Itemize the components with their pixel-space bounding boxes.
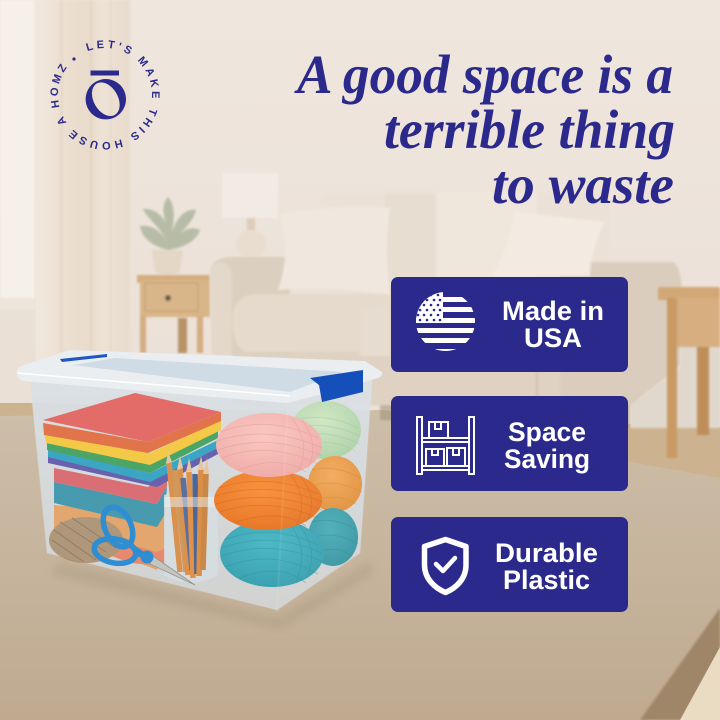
title xyxy=(294,44,675,215)
badge: made in USA xyxy=(391,277,628,372)
side table left xyxy=(137,275,210,353)
front-row yarn: teal xyxy=(220,519,324,587)
curtain xyxy=(36,0,130,362)
sofa xyxy=(210,192,682,406)
label: Durable xyxy=(495,538,598,568)
twine spool xyxy=(49,517,123,563)
badge: made in USA: USA xyxy=(524,323,582,353)
logo badge xyxy=(50,40,160,150)
label: Made in xyxy=(502,296,604,326)
side table right xyxy=(658,287,720,458)
icon: US flag circle xyxy=(416,292,476,352)
floor and rug xyxy=(0,403,720,720)
back-row yarn: orange xyxy=(308,456,362,512)
felt block stack xyxy=(54,468,167,570)
logo mark: o with macron xyxy=(86,70,126,119)
badge: durable plastic: Plastic xyxy=(503,565,590,595)
shadow under sofa xyxy=(380,405,630,428)
box shadow xyxy=(50,560,372,630)
plant xyxy=(140,197,200,275)
front-row yarn: orange xyxy=(214,470,322,530)
badge: durable plastic xyxy=(391,517,628,612)
front-row yarn: pink xyxy=(216,413,322,477)
title: to waste xyxy=(492,154,674,215)
circular slogan: LET'S MAKE THIS HOUSE A HOMZ xyxy=(50,40,160,150)
scissors xyxy=(92,502,195,585)
lamp xyxy=(222,173,278,258)
icon: shield with check xyxy=(424,540,466,592)
separator dot xyxy=(72,57,76,61)
icon: shelf with boxes xyxy=(417,417,474,474)
storage box with craft supplies xyxy=(17,350,382,630)
wall below right table xyxy=(630,345,720,428)
lid xyxy=(17,350,382,403)
title: A good space is a xyxy=(294,44,673,105)
label: Space xyxy=(508,417,586,447)
window xyxy=(0,0,35,405)
clear box front panes xyxy=(30,380,372,610)
red block xyxy=(54,468,167,504)
orange block xyxy=(54,505,165,570)
badge: space saving: Saving xyxy=(504,444,590,474)
back-row yarn: teal xyxy=(308,508,358,566)
box back and body xyxy=(30,380,372,610)
blue clip: back left xyxy=(60,354,107,362)
title: terrible thing xyxy=(384,99,675,160)
stack of rainbow felt sheets xyxy=(43,393,221,487)
blue clip: front right xyxy=(310,370,363,402)
badge: space saving xyxy=(391,396,628,491)
teal block xyxy=(54,482,167,527)
jar of pencils xyxy=(164,452,218,582)
back-row yarn: green xyxy=(291,401,361,459)
